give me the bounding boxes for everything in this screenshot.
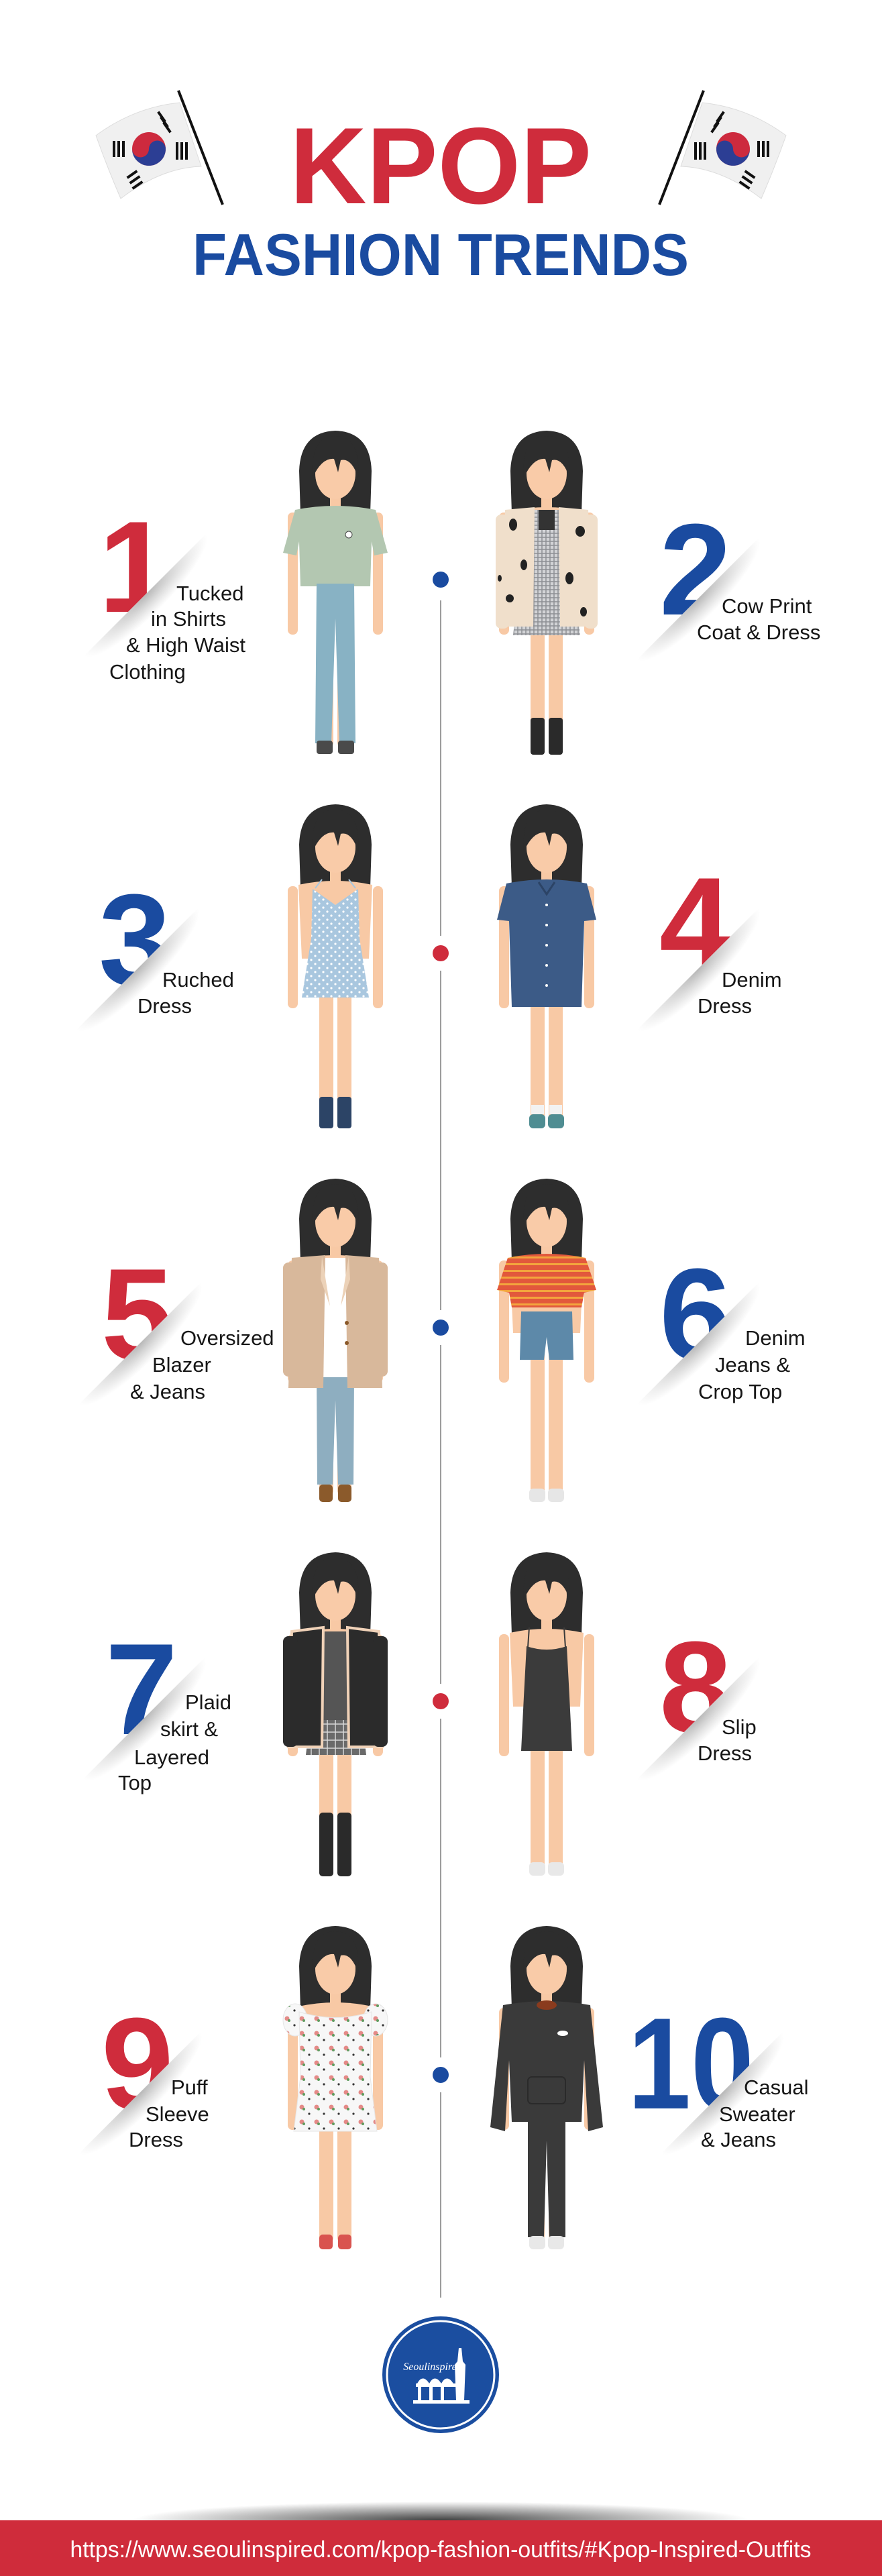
- figure 5: [283, 1179, 388, 1502]
- label 4: Denim: [722, 968, 782, 991]
- figure 9: [283, 1926, 388, 2249]
- label 4: Dress: [698, 994, 752, 1018]
- figure 2: [496, 431, 598, 755]
- label 7: Layered: [134, 1746, 209, 1769]
- label 7: Top: [118, 1771, 152, 1794]
- number 8: 8: [659, 1615, 732, 1760]
- item 7: Plaid skirt & Layered Top: [67, 1617, 264, 1838]
- label 8: Slip: [722, 1715, 757, 1739]
- label 10: & Jeans: [701, 2128, 776, 2151]
- label 1: & High Waist: [126, 633, 245, 657]
- label 1: in Shirts: [151, 607, 226, 631]
- number 9: 9: [101, 1991, 174, 2137]
- label 9: Puff: [171, 2076, 208, 2099]
- label 9: Sleeve: [146, 2102, 209, 2126]
- label 2: Cow Print: [722, 594, 812, 618]
- label 3: [137, 968, 234, 1018]
- subtitle: FASHION TRENDS: FASHION TRENDS: [192, 221, 689, 288]
- label 7: [118, 1690, 231, 1794]
- timeline dot 3: [423, 1310, 458, 1345]
- label 1: Clothing: [109, 660, 186, 684]
- label 1: [109, 582, 245, 684]
- figure 8: [499, 1552, 594, 1876]
- label 4: [698, 968, 782, 1018]
- item 6: Denim Jeans & Crop Top: [621, 1242, 818, 1463]
- item 3: Ruched Dress: [60, 867, 257, 1089]
- label 8: [698, 1715, 757, 1765]
- footer band with URL: [0, 2520, 882, 2576]
- figure 6: [497, 1179, 596, 1502]
- label 5: & Jeans: [130, 1380, 205, 1403]
- label 6: [698, 1326, 806, 1403]
- logo: Seoulinspired badge: Seoulinspired: [403, 2361, 463, 2373]
- label 6: Crop Top: [698, 1380, 782, 1403]
- item 1: Tucked in Shirts: [68, 494, 265, 714]
- label 10: Sweater: [719, 2102, 795, 2126]
- figure 1: [283, 431, 388, 754]
- logo: Seoulinspired badge: [382, 2316, 499, 2433]
- label 5: Oversized: [180, 1326, 274, 1350]
- label 6: Jeans &: [715, 1353, 790, 1377]
- timeline dot 5: [423, 2057, 458, 2092]
- label 2: Coat & Dress: [697, 621, 820, 644]
- figure 10: [490, 1926, 603, 2249]
- label 5: [130, 1326, 274, 1403]
- number 10: 10: [628, 1991, 754, 2137]
- item 2: Cow Print Coat & Dress: [621, 497, 820, 718]
- title: KPOP: KPOP: [290, 105, 592, 227]
- item 9: Puff Sleeve Dress: [63, 1991, 260, 2212]
- label 10: Casual: [744, 2076, 809, 2099]
- figure 7: [283, 1552, 388, 1876]
- number 2: 2: [659, 497, 732, 643]
- timeline dot 2: [423, 936, 458, 971]
- timeline dot 4: [423, 1684, 458, 1719]
- number 4: 4: [659, 851, 732, 996]
- number 5: 5: [101, 1242, 174, 1387]
- label 9: Dress: [129, 2128, 183, 2151]
- item 5: Oversized Blazer & Jeans: [63, 1242, 274, 1463]
- number 7: 7: [105, 1617, 178, 1762]
- number 6: 6: [659, 1242, 732, 1387]
- label 6: Denim: [745, 1326, 806, 1350]
- label 8: Dress: [698, 1741, 752, 1765]
- label 2: [697, 594, 820, 644]
- number 3: 3: [99, 867, 171, 1013]
- timeline line: [440, 600, 441, 2298]
- flag: left: [96, 91, 223, 205]
- figure 3: [288, 804, 383, 1128]
- timeline dot 1: [423, 562, 458, 597]
- footer band with URL: https://www.seoulinspired.com/kpop-fashion-outfits/#Kpop-Inspired-Outfits: [70, 2537, 812, 2563]
- label 9: [129, 2076, 209, 2151]
- label 1: Tucked: [176, 582, 244, 605]
- flag: right: [659, 91, 786, 205]
- number 1: 1: [99, 494, 171, 640]
- item 8: Slip Dress: [621, 1615, 818, 1838]
- item 10: Casual Sweater & Jeans: [628, 1991, 842, 2212]
- label 10: [701, 2076, 809, 2151]
- label 5: Blazer: [152, 1353, 211, 1377]
- label 3: Ruched: [162, 968, 234, 991]
- label 7: skirt &: [160, 1717, 218, 1741]
- label 3: Dress: [137, 994, 192, 1018]
- footer shadow: [132, 2502, 749, 2539]
- item 4: Denim Dress: [621, 851, 818, 1089]
- figure 4: [497, 804, 596, 1128]
- label 7: Plaid: [185, 1690, 231, 1714]
